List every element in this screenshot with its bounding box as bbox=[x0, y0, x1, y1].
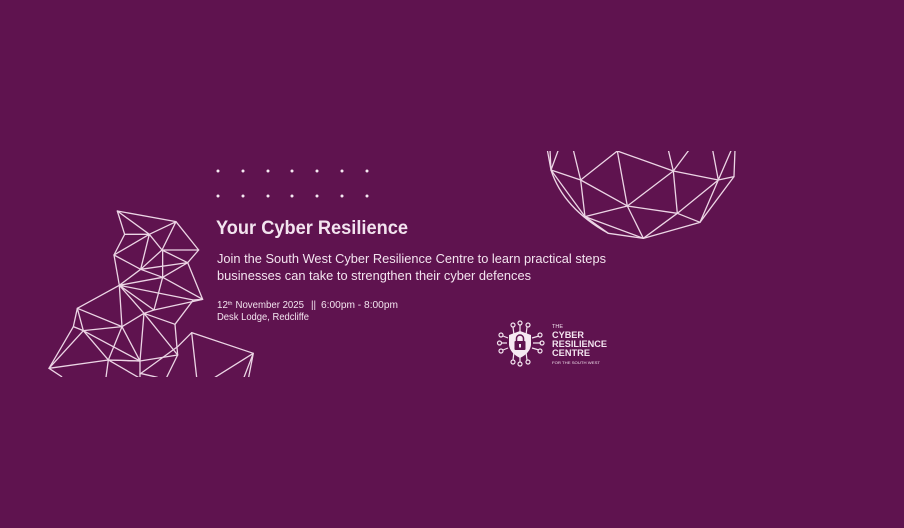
logo wordmark: CYBER bbox=[552, 330, 584, 341]
icon: right polygon mesh bbox=[547, 150, 735, 238]
intro text: Join the South West Cyber Resilience Centre to learn practical steps bbox=[217, 251, 606, 266]
icon: shield with padlock and circuit nodes bbox=[498, 321, 544, 366]
intro text: businesses can take to strengthen their cyber defences bbox=[217, 268, 531, 283]
event details bbox=[217, 300, 398, 323]
logo wordmark: THE bbox=[552, 324, 564, 330]
event details: Desk Lodge, Redcliffe bbox=[217, 312, 310, 323]
logo wordmark: RESILIENCE bbox=[552, 339, 607, 350]
event details: 6:00pm - 8:00pm bbox=[321, 300, 398, 311]
logo: The Cyber Resilience Centre bbox=[498, 321, 607, 366]
event details: November 2025 bbox=[236, 300, 305, 311]
logo wordmark: FOR THE SOUTH WEST bbox=[552, 361, 601, 365]
dot grid bbox=[216, 170, 368, 198]
title: Your Cyber Resilience bbox=[216, 217, 408, 239]
intro text bbox=[217, 251, 606, 283]
icon: left polygon mesh bbox=[49, 211, 253, 377]
logo wordmark: CENTRE bbox=[552, 348, 590, 359]
event details: th bbox=[228, 301, 232, 307]
event details: || bbox=[311, 300, 316, 311]
logo wordmark bbox=[552, 324, 607, 365]
event details: 12 bbox=[217, 300, 228, 311]
